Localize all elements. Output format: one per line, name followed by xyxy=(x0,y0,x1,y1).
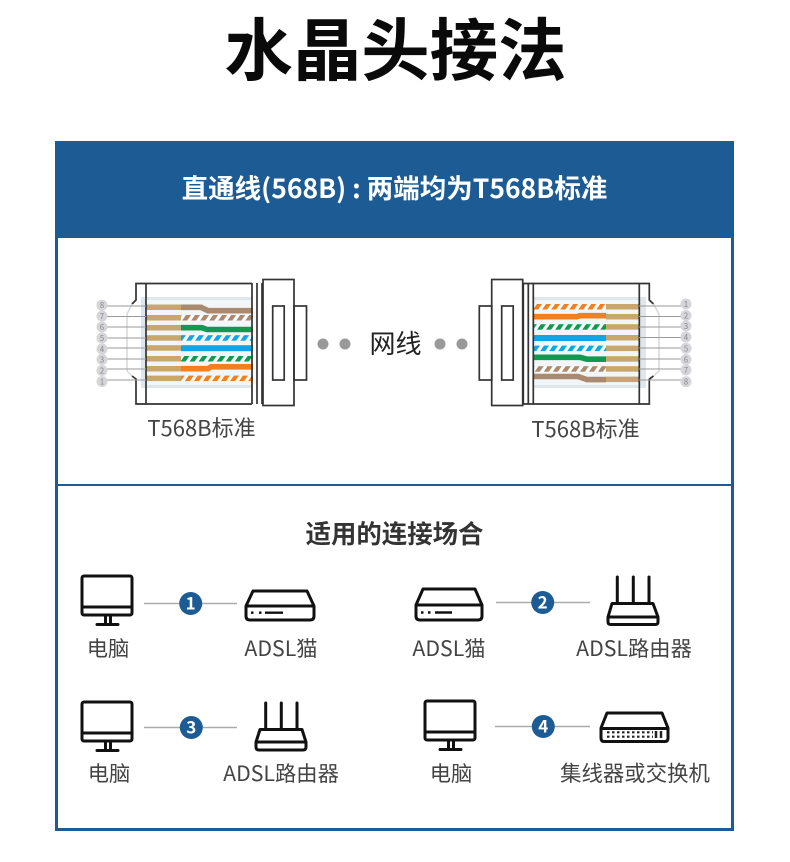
right connector body xyxy=(523,284,654,404)
connector 3 xyxy=(144,714,237,739)
connector 4 xyxy=(495,712,590,738)
scenario 3 xyxy=(82,702,339,788)
left connector pin numbers: 4 xyxy=(100,344,105,355)
label: right T568B: T568B标准 xyxy=(531,412,640,444)
left connector pin numbers: 2 xyxy=(100,366,105,376)
right connector pin numbers: 8 xyxy=(684,377,689,388)
panel: header band xyxy=(55,141,734,238)
label: left T568B: T568B标准 xyxy=(147,411,256,443)
right connector pin numbers: 6 xyxy=(684,354,689,366)
left connector pin numbers: 8 xyxy=(100,300,105,311)
right connector pin numbers xyxy=(680,298,692,388)
label: ADSL modem: ADSL猫 xyxy=(244,632,318,663)
heading: applicable scenarios: 适用的连接场合 xyxy=(306,515,483,551)
left connector diagram xyxy=(96,280,306,406)
connector 2: 2 xyxy=(538,588,548,614)
left connector pin numbers: 1 xyxy=(100,376,104,388)
right connector wire panel xyxy=(533,297,646,388)
icon: ADSL modem xyxy=(416,589,482,620)
left connector pin numbers: 6 xyxy=(100,322,105,333)
heading: straight-through cable: 直通线(568B) : 两端均为T568B标准 xyxy=(182,167,607,206)
connector 3: 3 xyxy=(186,714,196,738)
left connector pin numbers: 5 xyxy=(100,333,104,344)
icon: monitor xyxy=(82,576,132,624)
right connector pin numbers: 3 xyxy=(684,321,688,332)
right connector pin numbers: 4 xyxy=(684,332,689,343)
left connector wire panel xyxy=(141,297,253,388)
panel: main frame xyxy=(55,141,734,830)
scenario 4 xyxy=(425,701,710,788)
icon: router xyxy=(256,703,306,750)
icon: monitor xyxy=(82,702,132,750)
right connector pin numbers: 1 xyxy=(684,299,688,310)
icon: ADSL modem xyxy=(246,591,314,620)
right connector pin numbers: 7 xyxy=(684,365,689,376)
left connector pin numbers: 7 xyxy=(100,311,105,322)
connector 2 xyxy=(496,588,590,614)
cable label: 网线 xyxy=(369,324,422,361)
label: PC: 电脑 xyxy=(88,757,130,788)
connector 1: 1 xyxy=(186,590,196,614)
connector 1 xyxy=(144,590,237,615)
right connector leader lines xyxy=(639,306,681,380)
left connector pin numbers: 3 xyxy=(100,354,104,366)
left connector leader lines xyxy=(107,306,146,380)
connector 4: 4 xyxy=(538,712,548,738)
label: PC: 电脑 xyxy=(87,632,129,663)
icon: network switch xyxy=(601,713,668,742)
icon: router xyxy=(608,577,658,624)
right connector diagram xyxy=(479,280,692,406)
left connector pin numbers xyxy=(96,300,108,388)
label: ADSL modem: ADSL猫 xyxy=(412,632,486,663)
icon: monitor xyxy=(425,701,475,750)
cable link with dots xyxy=(318,324,468,361)
right connector wires xyxy=(533,304,639,382)
right connector pin numbers: 2 xyxy=(684,310,689,322)
left connector wires xyxy=(146,304,253,381)
left connector body xyxy=(132,284,252,404)
label: PC: 电脑 xyxy=(430,757,472,788)
scenario 2 xyxy=(412,577,692,663)
scenario 1 xyxy=(82,576,318,663)
right connector pin numbers: 5 xyxy=(684,343,688,354)
label: ADSL router: ADSL路由器 xyxy=(223,757,339,788)
label: ADSL router: ADSL路由器 xyxy=(576,632,692,663)
label: hub or switch: 集线器或交换机 xyxy=(560,757,710,788)
